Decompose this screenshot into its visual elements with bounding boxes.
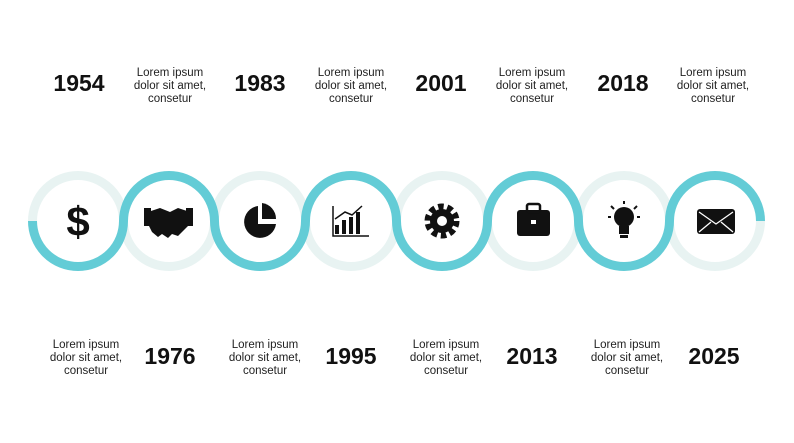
text top 4: Lorem ipsum — [680, 67, 746, 79]
year 2001: 2001 — [415, 70, 467, 96]
year 2025: 2025 — [688, 343, 740, 369]
icon: pie chart — [244, 203, 276, 238]
text top 2: dolor sit amet, — [315, 80, 387, 92]
year 1954: 1954 — [53, 70, 105, 96]
year 2013: 2013 — [506, 343, 558, 369]
text bottom 4 — [591, 339, 663, 377]
text bottom 3: Lorem ipsum — [413, 339, 479, 351]
text top 2 — [315, 67, 387, 105]
text bottom 3: dolor sit amet, — [410, 352, 482, 364]
text top 2: consetur — [329, 93, 373, 105]
text top 1 — [134, 67, 206, 105]
text top 3: Lorem ipsum — [499, 67, 565, 79]
icon: bar chart — [333, 206, 369, 236]
text top 1: consetur — [148, 93, 192, 105]
text top 4: consetur — [691, 93, 735, 105]
text top 3 — [496, 67, 568, 105]
icon: handshake — [144, 208, 193, 238]
icon: gear — [429, 208, 455, 234]
text bottom 3 — [410, 339, 482, 377]
text top 4 — [677, 67, 749, 105]
year 1976: 1976 — [144, 343, 196, 369]
text top 4: dolor sit amet, — [677, 80, 749, 92]
icon: light bulb — [608, 201, 640, 238]
text bottom 4: dolor sit amet, — [591, 352, 663, 364]
icon: dollar: $ — [66, 198, 90, 245]
text bottom 2: dolor sit amet, — [229, 352, 301, 364]
text top 2: Lorem ipsum — [318, 67, 384, 79]
text bottom 1: dolor sit amet, — [50, 352, 122, 364]
text bottom 2 — [229, 339, 301, 377]
icon: envelope — [697, 209, 735, 234]
text bottom 3: consetur — [424, 365, 468, 377]
text bottom 1: consetur — [64, 365, 108, 377]
text top 3: consetur — [510, 93, 554, 105]
text bottom 2: consetur — [243, 365, 287, 377]
icon: briefcase — [517, 204, 550, 236]
text bottom 4: Lorem ipsum — [594, 339, 660, 351]
year 2018: 2018 — [597, 70, 649, 96]
text bottom 1: Lorem ipsum — [53, 339, 119, 351]
text bottom 4: consetur — [605, 365, 649, 377]
text top 3: dolor sit amet, — [496, 80, 568, 92]
year 1995: 1995 — [325, 343, 377, 369]
text bottom 2: Lorem ipsum — [232, 339, 298, 351]
text top 1: Lorem ipsum — [137, 67, 203, 79]
text bottom 1 — [50, 339, 122, 377]
teal wave — [32, 176, 760, 266]
year 1983: 1983 — [234, 70, 286, 96]
text top 1: dolor sit amet, — [134, 80, 206, 92]
